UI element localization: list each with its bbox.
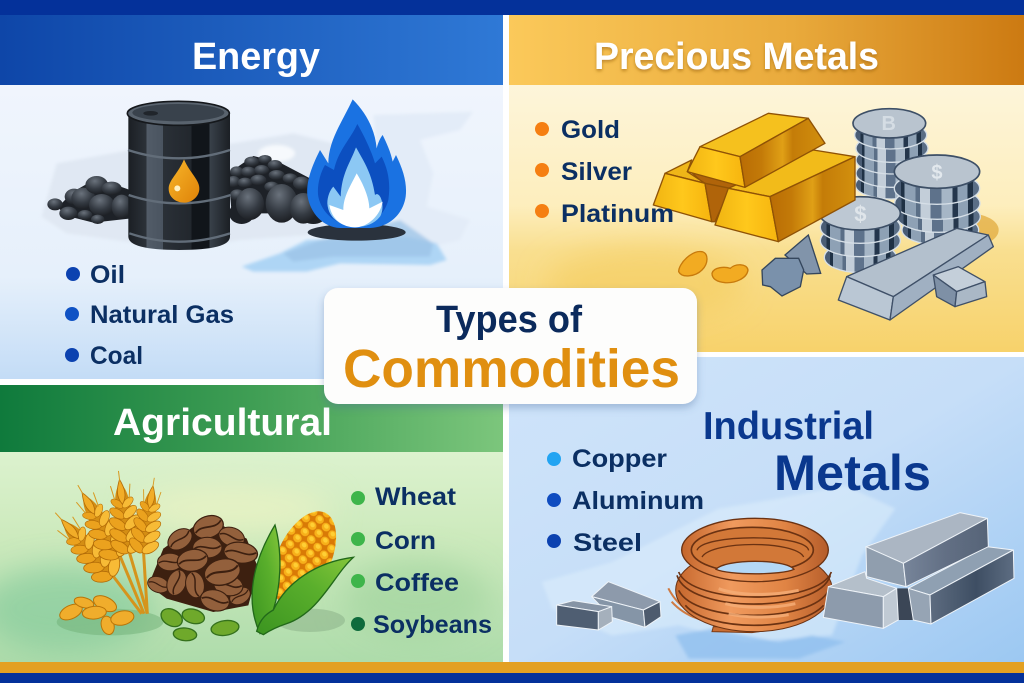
icon: small aluminum ingots	[557, 582, 661, 630]
icon: silver coin stacks: $	[854, 202, 866, 227]
icon: oil drop	[169, 159, 199, 203]
heading: Industrial Metals: Metals	[774, 445, 931, 501]
icon: copper wire coil	[668, 518, 832, 633]
title: Types of: Types of	[436, 299, 582, 341]
icon: silver coin stacks	[820, 109, 999, 273]
list: agricultural items: Corn	[375, 527, 436, 555]
list: industrial metal items	[547, 445, 704, 557]
icon: silver bars and nuggets	[679, 228, 993, 320]
icon: corn cob	[252, 501, 353, 635]
heading: Industrial Metals: Industrial	[703, 405, 874, 448]
heading: Agricultural: Agricultural	[113, 402, 332, 444]
list: agricultural items: Coffee	[375, 569, 459, 597]
icon: wheat	[41, 469, 171, 636]
heading: Industrial Metals	[703, 405, 931, 501]
list: industrial metal items: Copper	[572, 445, 667, 473]
icon: silver coin stacks: $	[931, 162, 943, 184]
background map blotches: industrial	[542, 485, 895, 659]
list: industrial metal items: Steel	[573, 529, 642, 557]
precious metals header band	[509, 15, 1024, 85]
list: industrial metal items: Aluminum	[572, 487, 704, 515]
center title card	[324, 288, 697, 404]
icon: blue gas flame	[307, 99, 406, 241]
icon: silver coin stacks: B	[881, 113, 896, 135]
energy header band	[0, 15, 503, 85]
list: precious metal items: Gold	[561, 116, 620, 144]
list: agricultural items: Wheat	[375, 483, 457, 511]
icon: coal piles	[47, 155, 325, 224]
title: Commodities: Commodities	[343, 339, 680, 399]
panel: energy	[0, 15, 503, 379]
list: energy items: Oil	[90, 261, 125, 289]
list: precious metal items: Silver	[561, 158, 632, 186]
icon: large aluminum ingots	[823, 513, 1014, 628]
list: energy items: Natural Gas	[90, 301, 234, 329]
panel: precious metals	[509, 15, 1024, 352]
background sand patches	[545, 247, 745, 320]
panel: agricultural	[0, 385, 503, 662]
bottom navy bar	[0, 673, 1024, 683]
list: precious metal items	[535, 116, 674, 228]
icon: gold bars	[653, 113, 855, 242]
icon: coffee beans	[145, 512, 259, 642]
bottom orange stripe	[0, 662, 1024, 673]
agricultural header band	[0, 385, 503, 452]
top navy bar	[0, 0, 1024, 15]
background patches	[0, 485, 490, 652]
list: energy items	[65, 261, 234, 370]
heading: Precious Metals: Precious Metals	[594, 36, 879, 78]
panel: industrial metals	[509, 357, 1024, 662]
icon: oil barrel	[127, 101, 231, 250]
list: energy items: Coal	[90, 342, 143, 370]
list: precious metal items: Platinum	[561, 200, 674, 228]
list: agricultural items	[351, 483, 492, 639]
list: agricultural items: Soybeans	[373, 611, 492, 639]
background map blotches: energy	[42, 112, 473, 272]
heading: Energy: Energy	[192, 36, 320, 78]
